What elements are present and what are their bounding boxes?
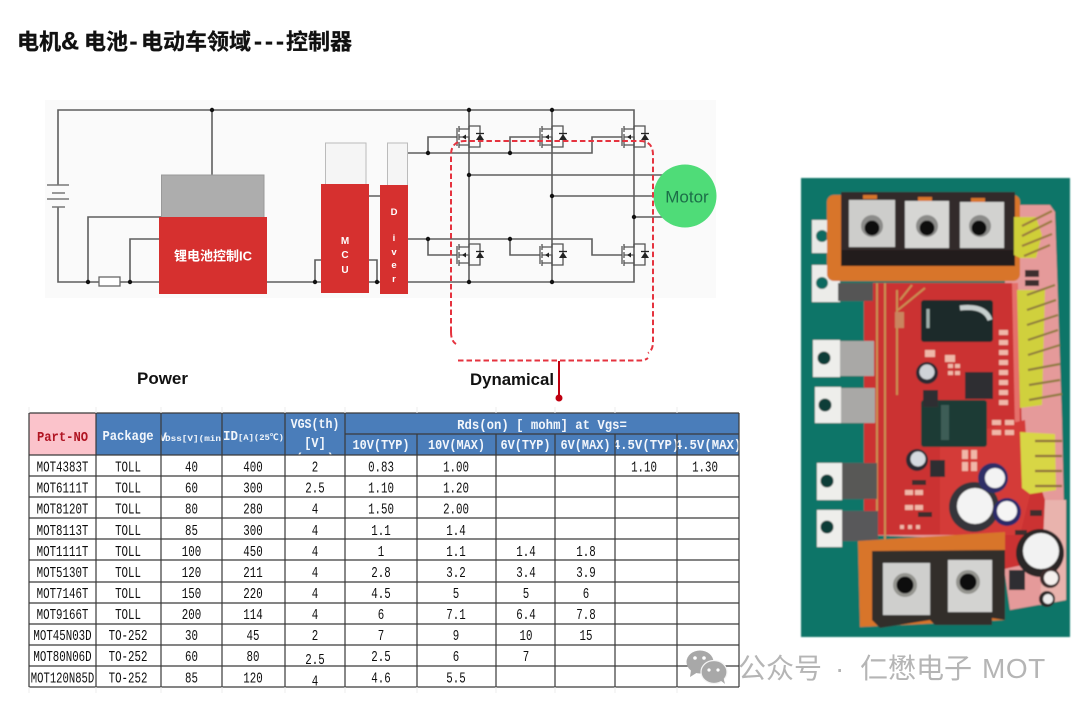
icon: high-side MOSFET 3: [622, 126, 649, 148]
column: VGS(th): 4: [312, 585, 318, 603]
column: VDSS: 150: [182, 585, 201, 603]
column: 10V max: 6: [453, 648, 459, 666]
column: ID: 300: [243, 522, 263, 540]
column: VGS(th): 4: [312, 522, 318, 540]
callout line: dynamical: [556, 361, 562, 402]
title: -: [276, 28, 284, 56]
header text: [38, 418, 738, 454]
column: package: TOLL: [115, 543, 141, 561]
dashed outline: dynamical section: [451, 141, 653, 360]
motor: Motor: [665, 188, 709, 206]
header text: Dss[V](min: [165, 434, 221, 444]
column: 6V typ: 1.4: [516, 543, 536, 561]
column: VDSS: [182, 459, 201, 687]
header text: 6V(TYP): [501, 437, 550, 453]
junction dots: [86, 108, 636, 284]
MCU block: M: [341, 236, 349, 247]
black inductor lower: [921, 400, 987, 447]
column: 10V typ: 1.50: [368, 501, 394, 518]
column: part number: MOT5130T: [37, 564, 89, 582]
column: 10V max: 7.1: [446, 606, 466, 624]
column: 6V typ: 6.4: [516, 606, 536, 624]
header text: Package: [102, 428, 154, 444]
column: 10V max: 3.2: [446, 564, 466, 582]
column: 10V typ: 1: [378, 543, 384, 561]
column: VGS(th): 4: [312, 564, 318, 582]
column: 4.5V max: 1.30: [692, 459, 718, 476]
column: VDSS: 80: [185, 501, 198, 518]
bottom orange plate: [858, 532, 1005, 627]
column: 10V max: 5.5: [446, 670, 466, 687]
copper traces: [877, 283, 925, 540]
column: ID: 120: [243, 670, 263, 687]
column: part number: MOT1111T: [37, 543, 89, 561]
column: ID: 114: [243, 606, 263, 624]
black inductor top: [921, 300, 993, 342]
capacitors: [906, 362, 1064, 607]
watermark text: MOT: [982, 653, 1046, 684]
table body background: [29, 455, 739, 687]
watermark text: 仁懋电子: [860, 653, 972, 684]
column: 6V max: 3.9: [576, 564, 596, 582]
column: 10V typ: 1.10: [368, 480, 394, 497]
top terminal block: [841, 192, 1015, 266]
column: package: TOLL: [115, 522, 141, 540]
column: 6V typ: [516, 543, 536, 666]
header text: VGS(th): [291, 416, 339, 432]
column: 6V max: 7.8: [576, 606, 596, 624]
column: ID: 220: [243, 585, 263, 603]
small board components: [895, 312, 1014, 529]
icon: low-side MOSFET 2: [540, 244, 567, 266]
header text: [V]: [304, 435, 326, 451]
title: -: [130, 28, 138, 56]
column: ID: 211: [243, 564, 263, 582]
column: package: TO-252: [109, 648, 147, 666]
column: part number: MOT80N06D: [33, 648, 92, 666]
column: part number: MOT120N85D: [31, 670, 94, 687]
column: part number: MOT9166T: [37, 606, 89, 624]
column: 10V typ: 7: [378, 627, 384, 645]
column: package: TOLL: [115, 480, 141, 497]
column: 10V max: [443, 459, 469, 687]
header background: [29, 413, 739, 455]
motor: [654, 164, 716, 228]
header text: Part-NO: [37, 429, 88, 445]
column: 10V typ: 4.5: [371, 585, 391, 603]
column: 10V max: 5: [453, 585, 459, 603]
title: 控制器: [286, 30, 352, 54]
icon: low-side MOSFET 1: [457, 244, 484, 266]
column: 6V max: 6: [583, 585, 589, 603]
header text: 4.5V(TYP): [613, 437, 679, 453]
photo background: [801, 178, 1070, 637]
column: VDSS: 85: [185, 670, 198, 687]
column: package: TO-252: [109, 670, 147, 687]
icon: battery: [47, 185, 69, 207]
column: 10V max: 1.20: [443, 480, 469, 497]
pale MCU block: [326, 143, 366, 186]
icon: low-side MOSFET 3: [622, 244, 649, 266]
icon: high-side MOSFET 2: [540, 126, 567, 148]
diagram background: [45, 100, 716, 298]
icon: high-side MOSFET 1: [457, 126, 484, 148]
icon: shunt resistor: [99, 277, 120, 286]
column: 10V max: 1.00: [443, 459, 469, 476]
column: 10V typ: 4.6: [371, 670, 391, 687]
driver block: r: [392, 274, 396, 285]
bottom terminal block: [872, 550, 1005, 628]
column: VGS(th): 2.5: [305, 480, 325, 497]
column: ID: 45: [247, 627, 259, 645]
column: VDSS: 30: [185, 627, 198, 645]
column: ID: 80: [247, 648, 260, 666]
title: 电动车领域: [141, 30, 251, 54]
column: ID: 400: [243, 459, 263, 476]
circuit diagram: [45, 100, 716, 298]
header text: (max): [295, 451, 335, 466]
driver block: [380, 185, 408, 294]
title: -: [265, 28, 273, 56]
column: 10V typ: 6: [378, 606, 384, 624]
table: MOSFET parts: [29, 407, 741, 693]
title: 电机: [17, 30, 61, 54]
column: 6V max: 15: [580, 627, 592, 645]
column: part number: MOT6111T: [37, 480, 89, 497]
column: VDSS: 60: [185, 480, 198, 497]
watermark text: 公众号: [738, 653, 822, 684]
driver block: v: [391, 247, 397, 258]
header text: 4.5V(MAX): [675, 437, 741, 453]
column: ID: 300: [243, 480, 263, 497]
column: VDSS: 100: [182, 543, 201, 561]
column: 10V typ: 2.8: [371, 564, 391, 582]
column: VGS(th): 4: [312, 606, 318, 624]
column: part number: MOT8120T: [37, 501, 89, 518]
column: 10V typ: 1.1: [371, 522, 391, 540]
column: part number: MOT4383T: [37, 459, 89, 476]
header text: 10V(TYP): [352, 437, 410, 453]
watermark: WeChat icon: [686, 650, 727, 684]
lithium battery control IC block: [159, 217, 267, 294]
column: ID: [243, 459, 263, 687]
column: part number: MOT45N03D: [33, 627, 92, 645]
MCU block: [321, 184, 369, 293]
driver block: e: [391, 260, 397, 271]
column: ID: 450: [243, 543, 263, 561]
column: part number: MOT7146T: [37, 585, 89, 603]
column: VDSS: 120: [182, 564, 201, 582]
column: VDSS: 40: [185, 459, 198, 476]
watermark text: ·: [835, 653, 844, 684]
title: &: [61, 28, 79, 56]
column: package: TOLL: [115, 459, 141, 476]
column: VDSS: 85: [185, 522, 198, 540]
header text: 6V(MAX): [561, 437, 610, 453]
column: 10V max: 2.00: [443, 501, 469, 518]
column: VGS(th): 4: [312, 673, 318, 690]
column: 10V typ: 2.5: [371, 648, 391, 666]
yellow connector top: [1014, 211, 1052, 258]
column: package: [109, 459, 147, 687]
column: part number: MOT8113T: [37, 522, 89, 540]
driver block: D: [391, 207, 398, 218]
column: 6V max: [576, 543, 596, 645]
header text: V: [159, 430, 167, 445]
top orange plate: [827, 195, 1020, 281]
smd parts dark: [912, 270, 1042, 535]
column: part number: [31, 459, 94, 687]
column: 10V typ: [368, 459, 394, 687]
column: package: TOLL: [115, 564, 141, 582]
column: VGS(th): 4: [312, 543, 318, 561]
column: package: TOLL: [115, 606, 141, 624]
column: ID: 280: [243, 501, 263, 518]
column: 6V max: 1.8: [576, 543, 596, 561]
header text: 10V(MAX): [428, 437, 485, 453]
column: package: TO-252: [109, 627, 147, 645]
MCU block: U: [341, 265, 349, 276]
column: 6V typ: 5: [523, 585, 529, 603]
column: package: TOLL: [115, 501, 141, 518]
column: VGS(th): 2: [312, 459, 318, 476]
ICs: [923, 372, 1025, 590]
column: VGS(th): 4: [312, 501, 318, 518]
label: Power: Power: [137, 370, 189, 388]
column: VGS(th): [305, 459, 325, 690]
column: 10V typ: 0.83: [368, 459, 394, 476]
column: package: TOLL: [115, 585, 141, 603]
column: 10V max: 1.1: [446, 543, 466, 561]
label: Dynamical: Dynamical: [470, 370, 554, 389]
column: 10V max: 9: [453, 627, 459, 645]
yellow connector lower: [1020, 432, 1062, 494]
header text: ID: [223, 429, 238, 445]
MCU block: C: [341, 250, 349, 261]
header text: Rds(on) [ mohm] at Vgs=: [457, 417, 627, 433]
photo: controller circuit board: [801, 178, 1070, 637]
transistor tabs left: [812, 220, 878, 547]
yellow connector middle: [1017, 285, 1062, 408]
title: -: [254, 28, 262, 56]
pale driver block: [388, 143, 408, 186]
column: VGS(th): 2.5: [305, 651, 325, 669]
column: 6V typ: 10: [520, 627, 533, 645]
driver block: i: [393, 233, 395, 244]
column: VGS(th): 2: [312, 627, 318, 645]
column: VDSS: 60: [185, 648, 198, 666]
power wiring: [58, 110, 665, 282]
lithium battery control IC block: 锂电池控制IC: [174, 248, 253, 264]
column: 10V max: 1.4: [446, 522, 466, 540]
pcb: [864, 205, 1066, 610]
grey block: [162, 175, 264, 219]
column: 4.5V typ: 1.10: [631, 459, 657, 476]
title: 电池: [84, 30, 128, 54]
column: VDSS: 200: [182, 606, 201, 624]
header text: [A](25℃): [238, 433, 284, 443]
column: 6V typ: 7: [523, 648, 529, 666]
column: 6V typ: 3.4: [516, 564, 536, 582]
